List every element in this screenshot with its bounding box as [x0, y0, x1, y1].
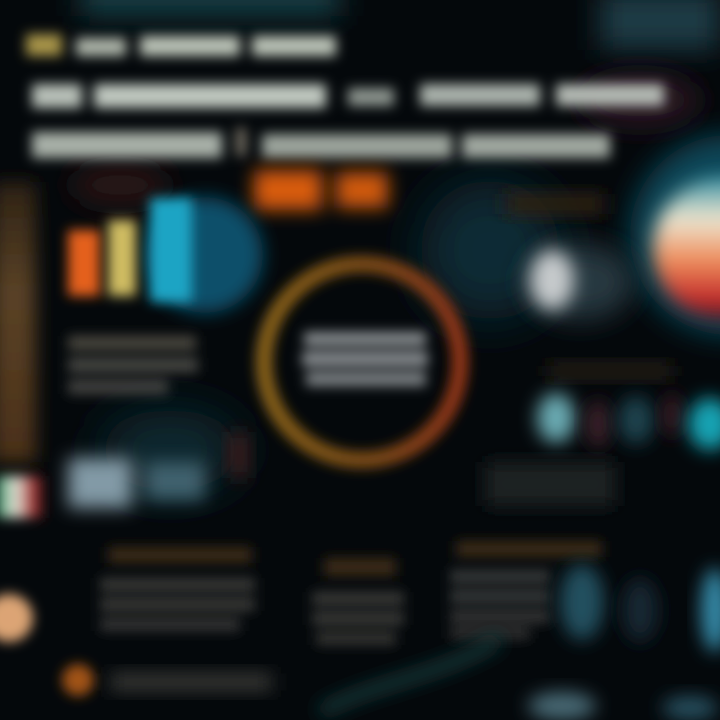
orange header badge [254, 170, 388, 210]
icon shadow [526, 244, 634, 320]
mid right heading [548, 364, 672, 378]
disc [653, 176, 720, 320]
ring label line 3 [306, 372, 426, 386]
icon: pale teal [537, 393, 575, 443]
column 3 heading [456, 541, 602, 557]
ring stroke [264, 264, 460, 460]
figure: bottom blob [528, 692, 596, 720]
left edge brown panel [0, 182, 36, 462]
badge left [254, 170, 322, 210]
figure: teal centre [560, 564, 604, 640]
bottom right figures [528, 564, 720, 720]
ring label line 2 [302, 352, 428, 366]
bottom text column 1 [100, 547, 255, 631]
icon: muted red right [663, 393, 681, 437]
left lower text block [68, 458, 205, 508]
ring label [302, 332, 428, 386]
text line 2 [68, 358, 198, 372]
icon: bright teal [688, 398, 720, 450]
bar: orange [68, 230, 100, 296]
column 1 heading [108, 547, 252, 563]
bottom text column 3 [450, 541, 602, 639]
small red marker [230, 432, 248, 478]
central ring [264, 264, 460, 460]
bar chart cluster [68, 197, 263, 313]
icon: muted red [586, 400, 610, 448]
background glows [70, 0, 720, 490]
column 3 body [450, 570, 550, 639]
orange bullet icon [62, 664, 94, 696]
icon highlight [530, 250, 574, 310]
bar: yellow [108, 220, 136, 296]
badge right [336, 172, 388, 208]
icon: deep teal [618, 396, 654, 444]
mid right text [485, 462, 615, 506]
text line 1 [68, 336, 196, 350]
teal circle backdrop [147, 197, 263, 313]
bar: cyan [150, 198, 192, 302]
lower block: dark part [145, 462, 205, 500]
text line 3 [68, 380, 168, 394]
figure: bottom right blob [662, 696, 718, 720]
figure: bright right [701, 568, 720, 652]
bottom text column 2 [312, 558, 404, 645]
title line 1 [26, 34, 336, 56]
column 2 heading [324, 558, 396, 576]
left text block [68, 336, 198, 394]
upper right heading [505, 194, 605, 214]
title line 2 [32, 84, 664, 108]
title line 3 [32, 128, 610, 158]
right sun circle [630, 135, 720, 335]
column 1 body [100, 578, 255, 631]
peach circle icon [0, 594, 33, 642]
column 2 body [312, 592, 404, 645]
center right icon [526, 244, 634, 320]
flag icon [0, 476, 44, 518]
halo [630, 135, 720, 335]
figure: dim [622, 578, 658, 642]
title [26, 34, 664, 158]
bottom left caption [110, 673, 272, 691]
mid right icons row [537, 393, 720, 450]
lower block: light part [68, 458, 132, 508]
ring label line 1 [304, 332, 426, 346]
teal streak [320, 640, 500, 712]
